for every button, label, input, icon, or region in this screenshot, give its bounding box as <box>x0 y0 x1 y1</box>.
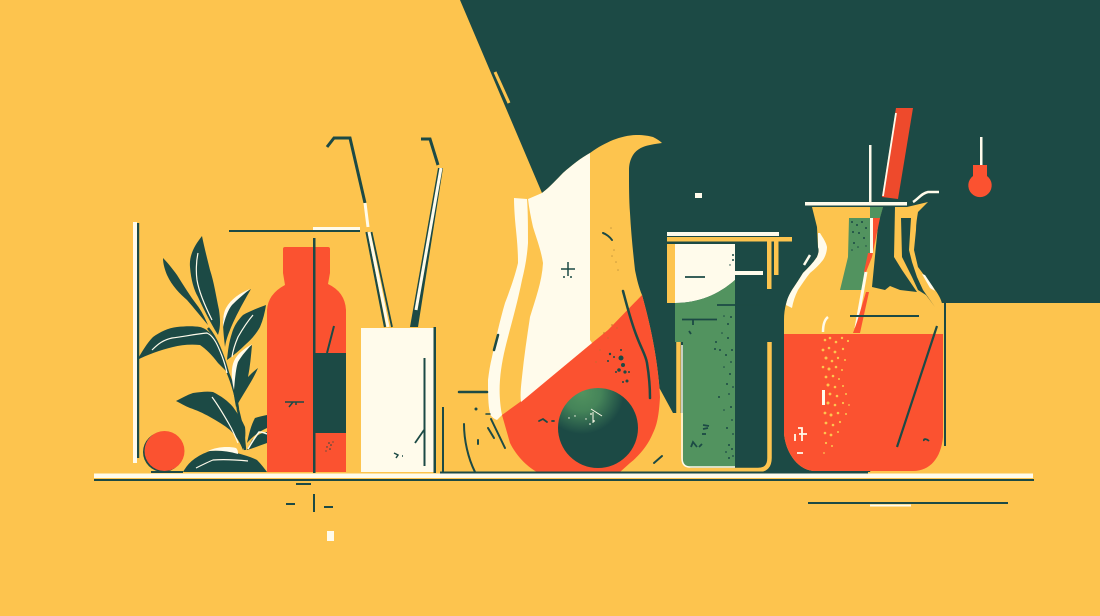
jar marks <box>795 255 946 453</box>
striped rod <box>853 218 880 333</box>
leaf: small right lower <box>247 432 267 450</box>
jar green panel <box>840 207 883 290</box>
plant <box>137 236 267 472</box>
marks below shelf <box>286 483 334 541</box>
leaf: large left <box>137 326 229 374</box>
leaf highlight: bottom <box>208 447 238 454</box>
beaker cream top <box>675 244 735 303</box>
pitcher speckles <box>607 349 630 383</box>
leaf: top left narrow <box>163 258 208 325</box>
leaf: bottom <box>183 451 267 472</box>
pitcher liquid <box>502 295 660 472</box>
left rod <box>327 138 392 327</box>
diagonal tick on panel edge <box>495 72 509 103</box>
leaf: upper right narrow <box>223 289 251 347</box>
pitcher ball <box>558 388 638 468</box>
bottle label <box>313 353 346 433</box>
background: dark green panel <box>460 0 1100 472</box>
left frame lines <box>133 222 360 463</box>
jar rim <box>805 202 907 206</box>
bottle marks <box>327 326 334 353</box>
leaf: upper right wide <box>227 305 266 360</box>
jar left highlight <box>786 233 827 308</box>
stem <box>208 328 245 450</box>
pitcher left highlight <box>488 198 528 420</box>
green panel speckles <box>851 221 867 251</box>
small cream mark on the panel <box>695 193 702 198</box>
jar <box>784 108 946 471</box>
thin vertical rod <box>869 145 872 202</box>
jar speckles <box>822 337 850 454</box>
beaker speckles <box>714 254 734 459</box>
green beaker <box>667 232 792 470</box>
rods <box>327 138 443 327</box>
beaker outline <box>678 342 770 470</box>
pitcher inner marks <box>459 233 662 472</box>
cream cup <box>361 327 444 473</box>
leaf: lower left <box>176 392 245 450</box>
jar right highlight <box>922 274 935 291</box>
bottle centre line <box>313 238 316 473</box>
leaf highlight: upper right <box>223 289 250 327</box>
pitcher <box>459 135 662 472</box>
jar body <box>784 202 943 471</box>
leaf highlight: mid right <box>232 344 252 390</box>
jar dark channel <box>901 218 935 307</box>
jar spout <box>913 192 939 202</box>
red bottle <box>267 238 346 473</box>
leaf: mid right <box>232 345 258 407</box>
leaf: top large <box>190 236 220 335</box>
right rod <box>410 139 443 327</box>
leaf veins <box>152 253 267 468</box>
jar dark neck <box>872 207 917 292</box>
red stick <box>882 108 913 199</box>
beaker marks <box>735 271 763 275</box>
pitcher body <box>488 135 662 472</box>
beaker lid <box>667 232 779 236</box>
beaker green liquid <box>675 280 735 467</box>
pitcher cream panel <box>521 153 592 402</box>
lower right line <box>808 502 1008 506</box>
leaf: small right upper <box>247 415 267 443</box>
red ball <box>143 431 184 473</box>
bulb dropper <box>968 137 992 197</box>
jar liquid <box>784 334 943 471</box>
pitcher plus mark <box>561 262 575 276</box>
beaker left band <box>667 244 675 303</box>
shelf <box>94 472 1034 481</box>
